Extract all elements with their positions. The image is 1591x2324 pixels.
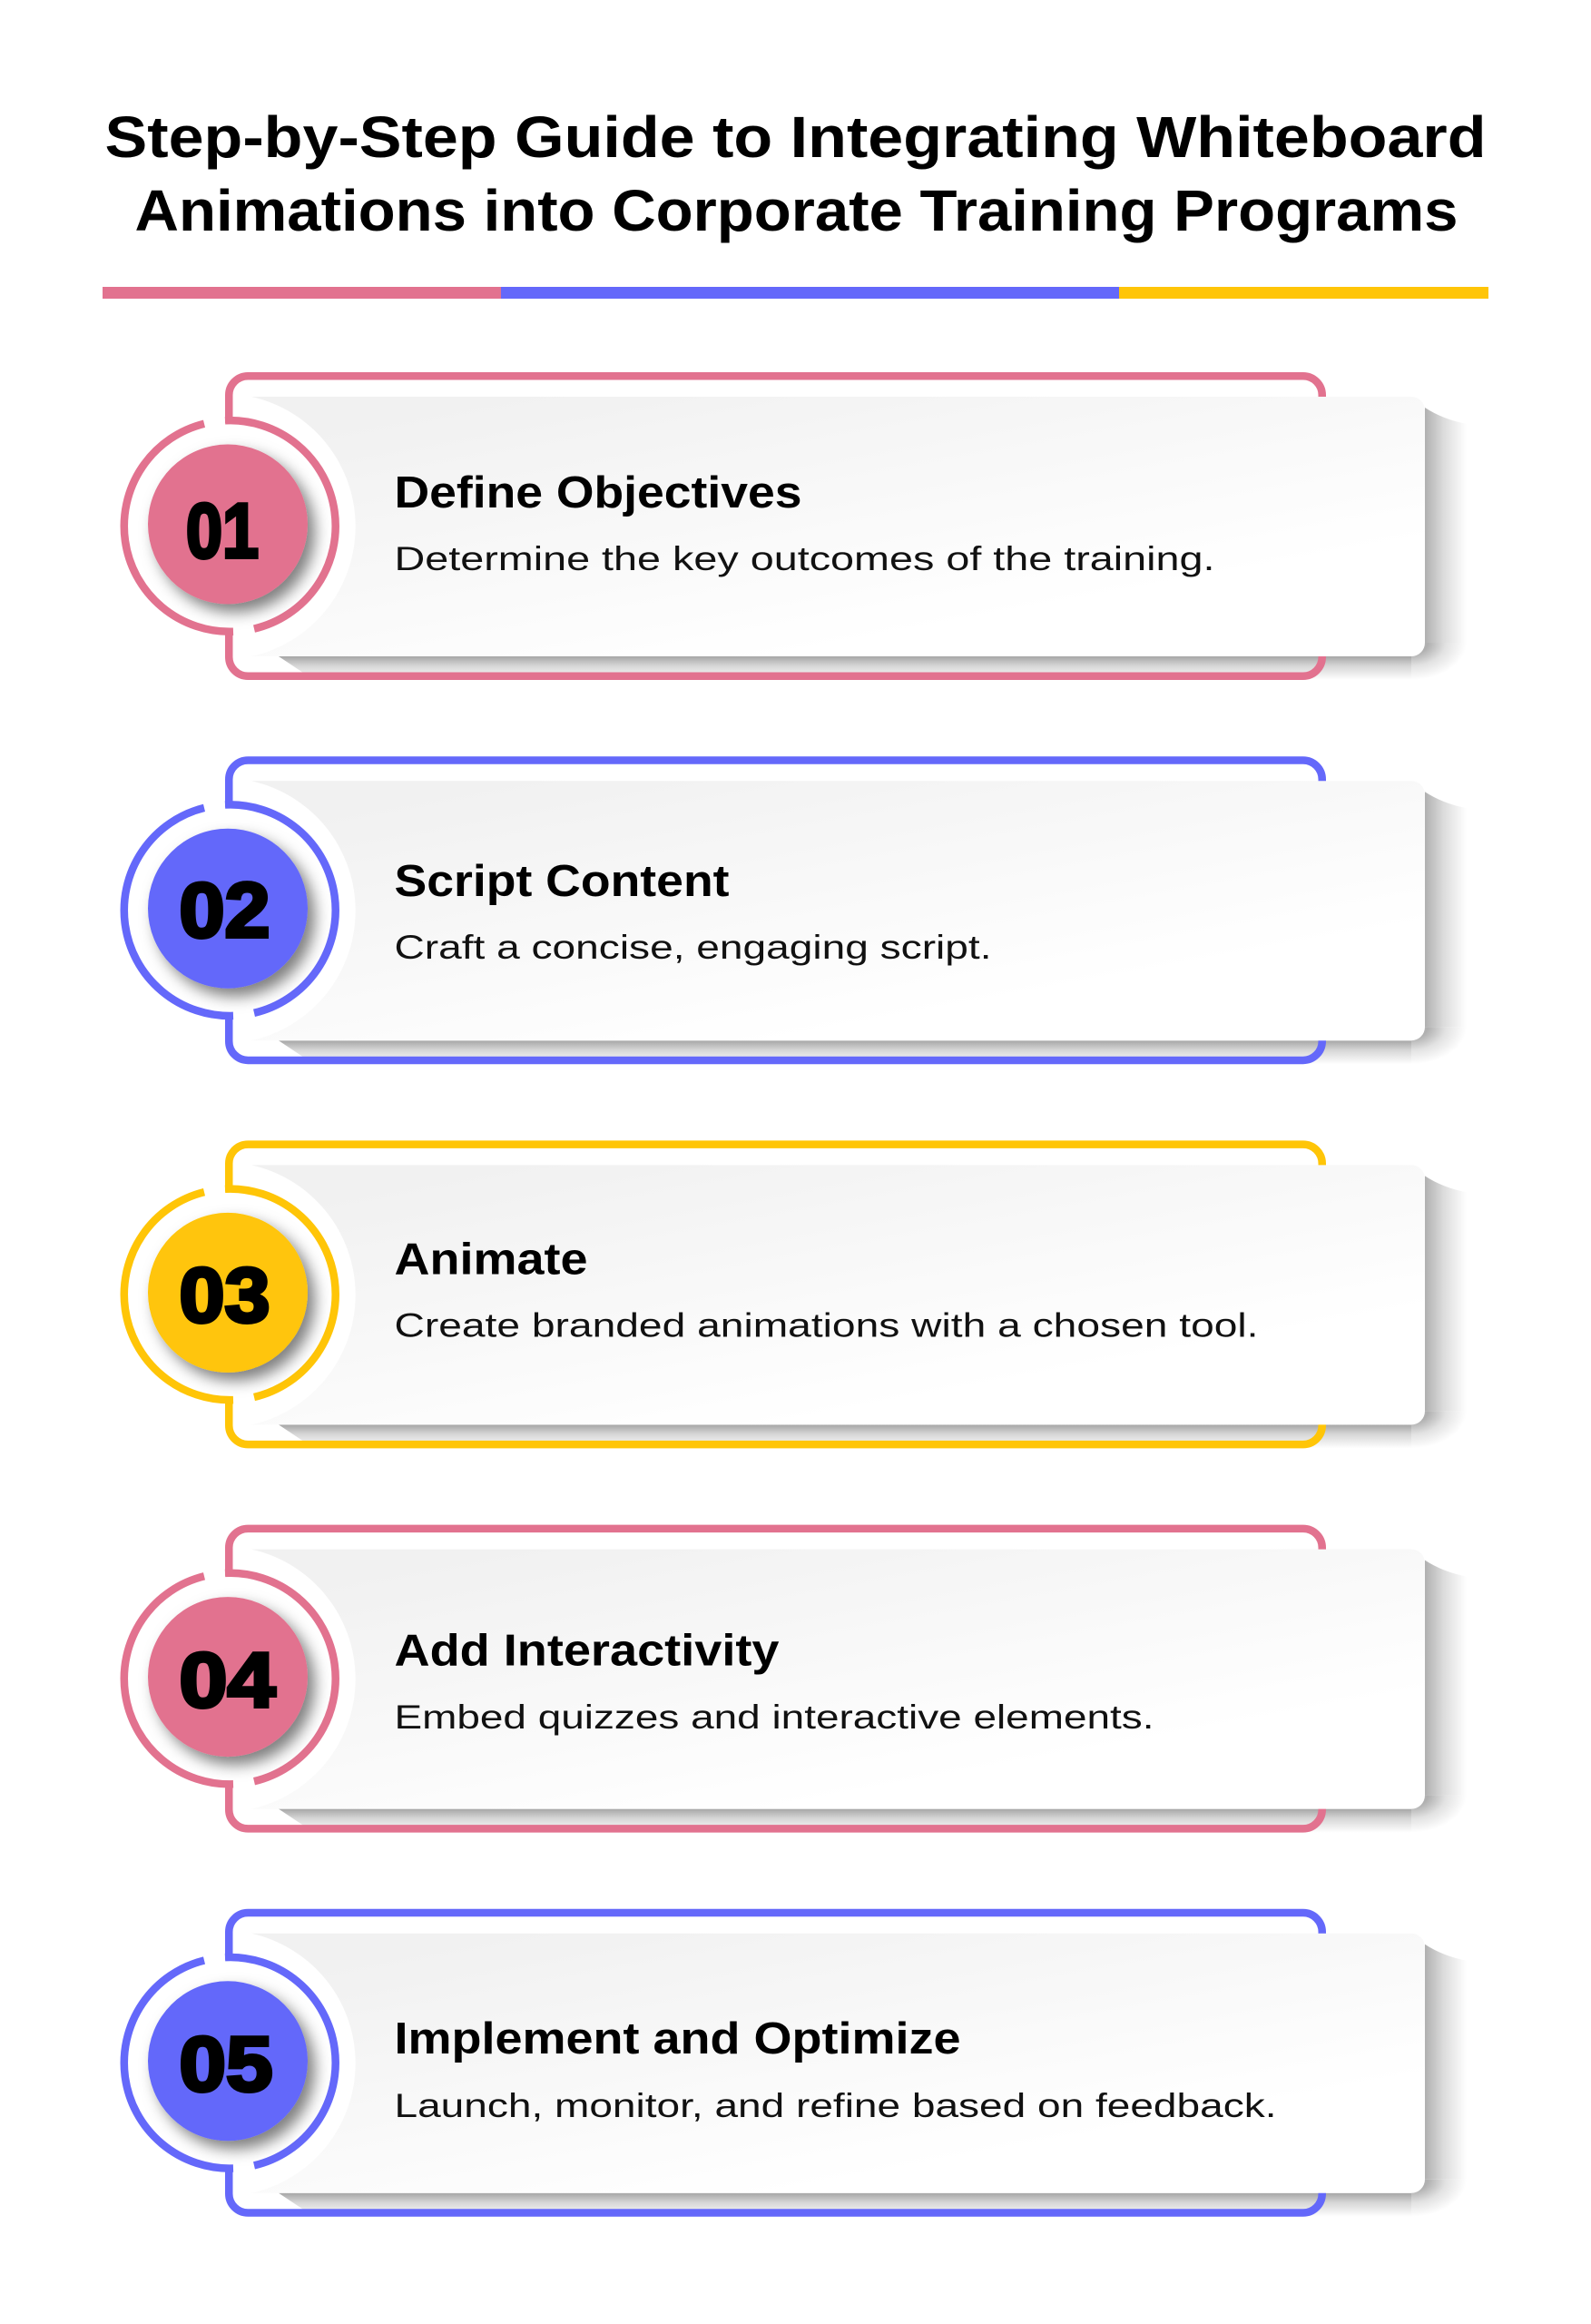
heading: Implement and Optimize (394, 2014, 960, 2063)
number: 02 (180, 868, 270, 954)
number: 01 (186, 488, 259, 575)
card (251, 1550, 1425, 1809)
card (251, 397, 1425, 656)
step 04 panel (124, 1529, 1467, 1833)
number disc (148, 1597, 308, 1757)
heading: Define Objectives (394, 468, 802, 517)
ring (124, 1573, 336, 1784)
ring (124, 1957, 336, 2169)
number: 04 (180, 1638, 276, 1724)
number disc (148, 1981, 308, 2141)
description: Create branded animations with a chosen tool. (394, 1307, 1258, 1344)
card (251, 1165, 1425, 1424)
title: Step-by-Step Guide to Integrating Whiteboard (105, 104, 1487, 170)
description: Determine the key outcomes of the training. (394, 540, 1214, 577)
card shadow (279, 792, 1467, 1064)
step 05 panel (124, 1913, 1467, 2217)
step 03 panel (124, 1145, 1467, 1448)
heading: Add Interactivity (394, 1627, 779, 1676)
step 02 panel (124, 760, 1467, 1064)
card shadow (279, 1176, 1467, 1448)
card shadow (279, 408, 1467, 680)
number disc (148, 445, 308, 605)
card (251, 1934, 1425, 2193)
outline frame (229, 1529, 1322, 1828)
title: Animations into Corporate Training Programs (134, 178, 1458, 243)
description: Embed quizzes and interactive elements. (394, 1699, 1154, 1736)
card shadow (279, 1945, 1467, 2217)
card shadow (279, 1561, 1467, 1833)
description: Launch, monitor, and refine based on feedback. (394, 2087, 1276, 2124)
outline frame (229, 376, 1322, 676)
outline frame (229, 1145, 1322, 1444)
number disc (148, 829, 308, 989)
outline frame (229, 1913, 1322, 2213)
step 01 panel (124, 376, 1467, 680)
ring (124, 420, 336, 632)
outline frame (229, 760, 1322, 1060)
heading: Animate (394, 1235, 588, 1284)
card (251, 781, 1425, 1040)
number disc (148, 1213, 308, 1373)
heading: Script Content (394, 857, 730, 906)
tri-colour title rule (103, 287, 1488, 299)
title (105, 104, 1487, 243)
ring (124, 804, 336, 1016)
number: 03 (180, 1253, 270, 1339)
number: 05 (180, 2022, 272, 2108)
ring (124, 1189, 336, 1400)
description: Craft a concise, engaging script. (394, 929, 991, 966)
